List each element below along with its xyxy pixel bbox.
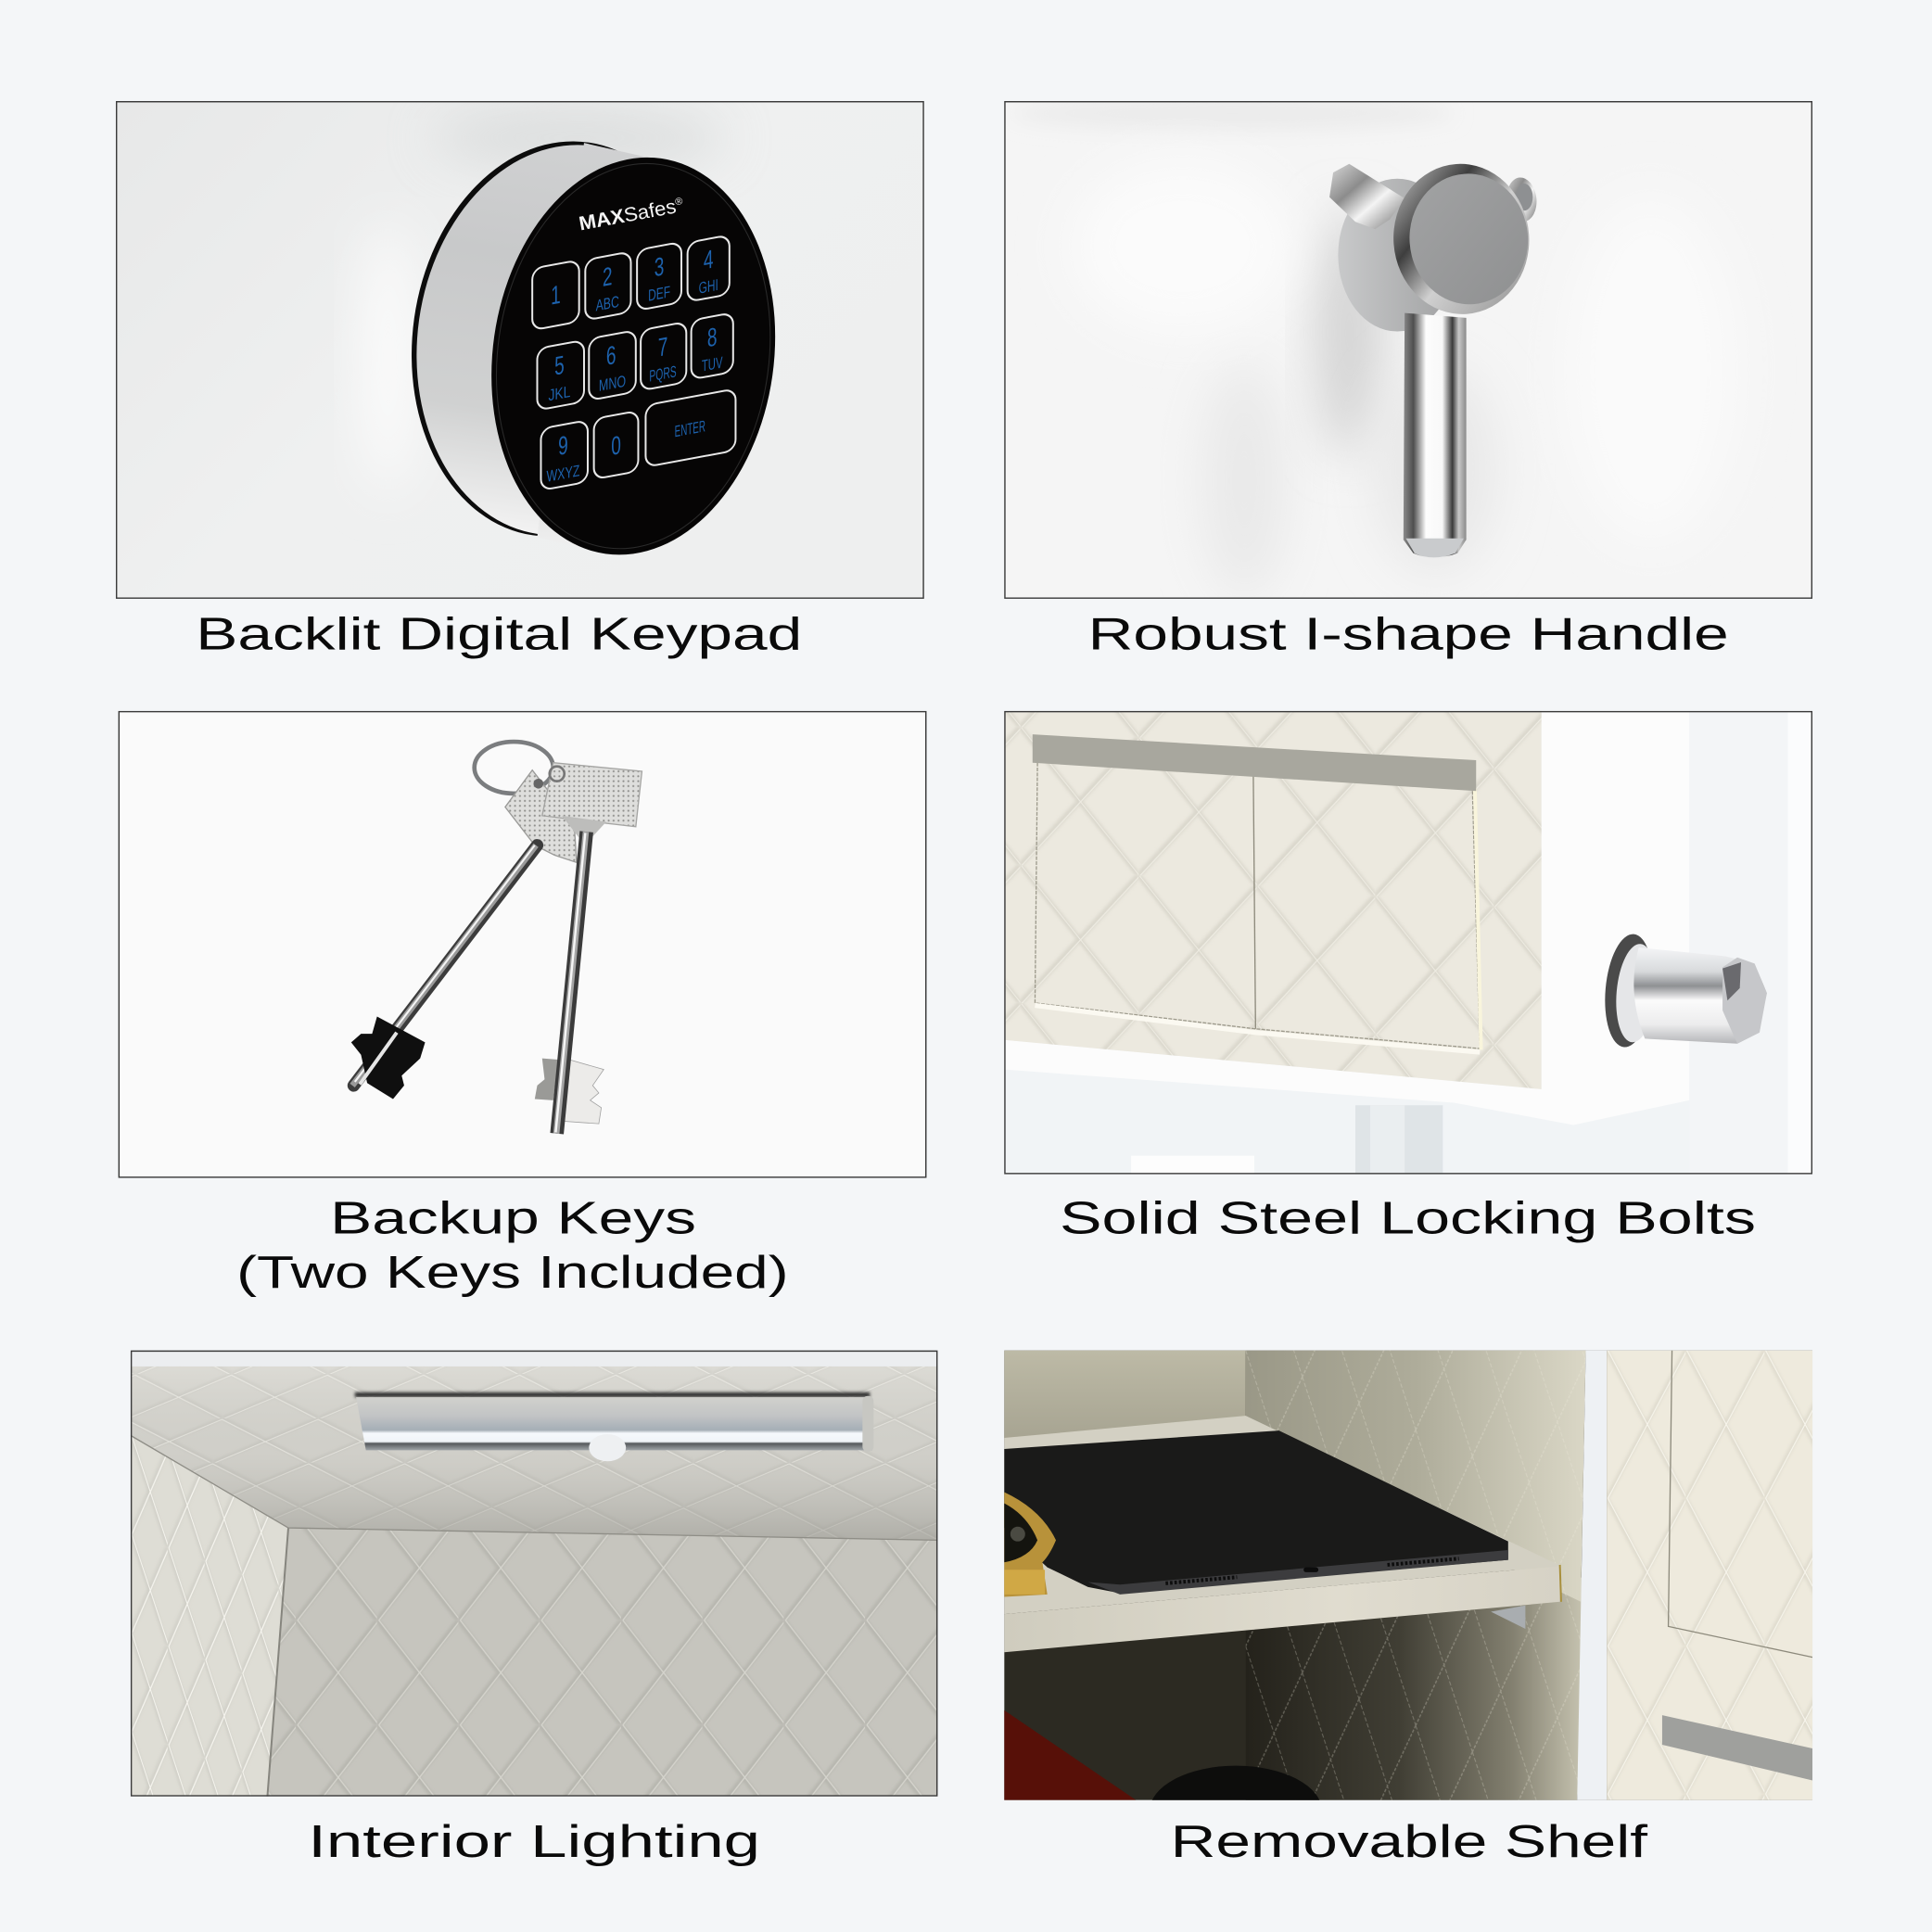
white door strip (1577, 1351, 1607, 1800)
icon: two keys on ring (351, 742, 642, 1134)
icon: gold watch (1004, 1493, 1056, 1596)
keypad buttons: 9 (558, 430, 568, 461)
panel: robust I-shape handle photo (1004, 96, 1812, 599)
handle back stud (1509, 178, 1537, 221)
quilted leather lining (1004, 711, 1542, 1089)
brand logo: ® (674, 196, 684, 208)
icon: handle assembly (1329, 159, 1539, 557)
keypad buttons: 1 (551, 280, 561, 311)
panel: interior lighting photo (131, 1351, 937, 1797)
keypad buttons: WXYZ (546, 461, 580, 486)
dark object (1151, 1765, 1320, 1800)
keypad buttons: 4 (704, 245, 714, 274)
handle back disc (1339, 178, 1439, 332)
brand logo: MAXSafes (578, 196, 676, 235)
pocket (1033, 734, 1481, 1052)
panel: backlit digital keypad photo (116, 101, 924, 599)
caption: Backup Keys (Two Keys Included): Backup Keys (330, 1192, 696, 1243)
shelf (1004, 1416, 1561, 1652)
red item (1004, 1710, 1136, 1800)
ceiling lining (131, 1366, 937, 1540)
keypad buttons: PQRS (649, 362, 677, 386)
door pocket seam (1669, 1351, 1812, 1658)
keypad buttons: TUV (702, 353, 723, 375)
right wall lower (1246, 1577, 1586, 1800)
caption: Interior Lighting: Interior Lighting (308, 1816, 760, 1867)
caption: Robust I-shape Handle: Robust I-shape Handle (1088, 608, 1729, 659)
icon: locking bolt (1601, 932, 1767, 1049)
keypad buttons: ENTER (675, 416, 705, 440)
icon: tablet (1004, 1430, 1508, 1595)
handle left stud (1329, 164, 1405, 229)
door strap (1662, 1715, 1812, 1781)
handle bar (1404, 313, 1467, 557)
caption: Backup Keys (Two Keys Included) (236, 1192, 789, 1298)
door lining (1607, 1351, 1812, 1800)
caption: Backlit Digital Keypad: Backlit Digital Keypad (196, 608, 802, 659)
pocket strap (1033, 734, 1476, 791)
shelf bracket (1491, 1606, 1525, 1629)
key B (535, 763, 642, 1134)
handle bevelled head (1393, 163, 1530, 314)
steel pole (1355, 1105, 1443, 1175)
upper back wall (1004, 1351, 1246, 1443)
keypad buttons: ABC (596, 292, 619, 314)
keypad buttons: 2 (603, 261, 613, 292)
key A (351, 770, 577, 1099)
panel: solid steel locking bolts photo (1004, 711, 1812, 1175)
icon: LED light bar (355, 1392, 873, 1461)
panel: removable shelf photo (1004, 1350, 1813, 1800)
key ring (475, 742, 553, 794)
keypad buttons: MNO (599, 372, 626, 395)
icon: keypad body rim (412, 141, 647, 536)
keypad buttons: 3 (655, 251, 664, 282)
keypad buttons: DEF (648, 282, 670, 305)
keypad buttons (532, 235, 735, 490)
keypad buttons: JKL (548, 382, 571, 404)
keypad buttons: 0 (611, 430, 621, 461)
keypad buttons: 8 (707, 322, 718, 352)
icon: keypad face (491, 158, 775, 554)
motion sensor (589, 1434, 626, 1461)
keypad buttons: 5 (554, 350, 565, 381)
caption: Removable Shelf: Removable Shelf (1171, 1816, 1647, 1867)
panel: backup keys photo (119, 711, 926, 1178)
right wall upper (1246, 1351, 1586, 1602)
keypad buttons: GHI (699, 275, 718, 298)
keypad buttons: 6 (606, 340, 616, 371)
caption: Solid Steel Locking Bolts: Solid Steel Locking Bolts (1060, 1192, 1756, 1243)
keypad buttons: 7 (658, 332, 667, 362)
door edge white (1004, 711, 1689, 1125)
left wall lining (131, 1435, 288, 1797)
caption: Backup Keys (Two Keys Included): (Two Keys Included) (236, 1247, 789, 1298)
